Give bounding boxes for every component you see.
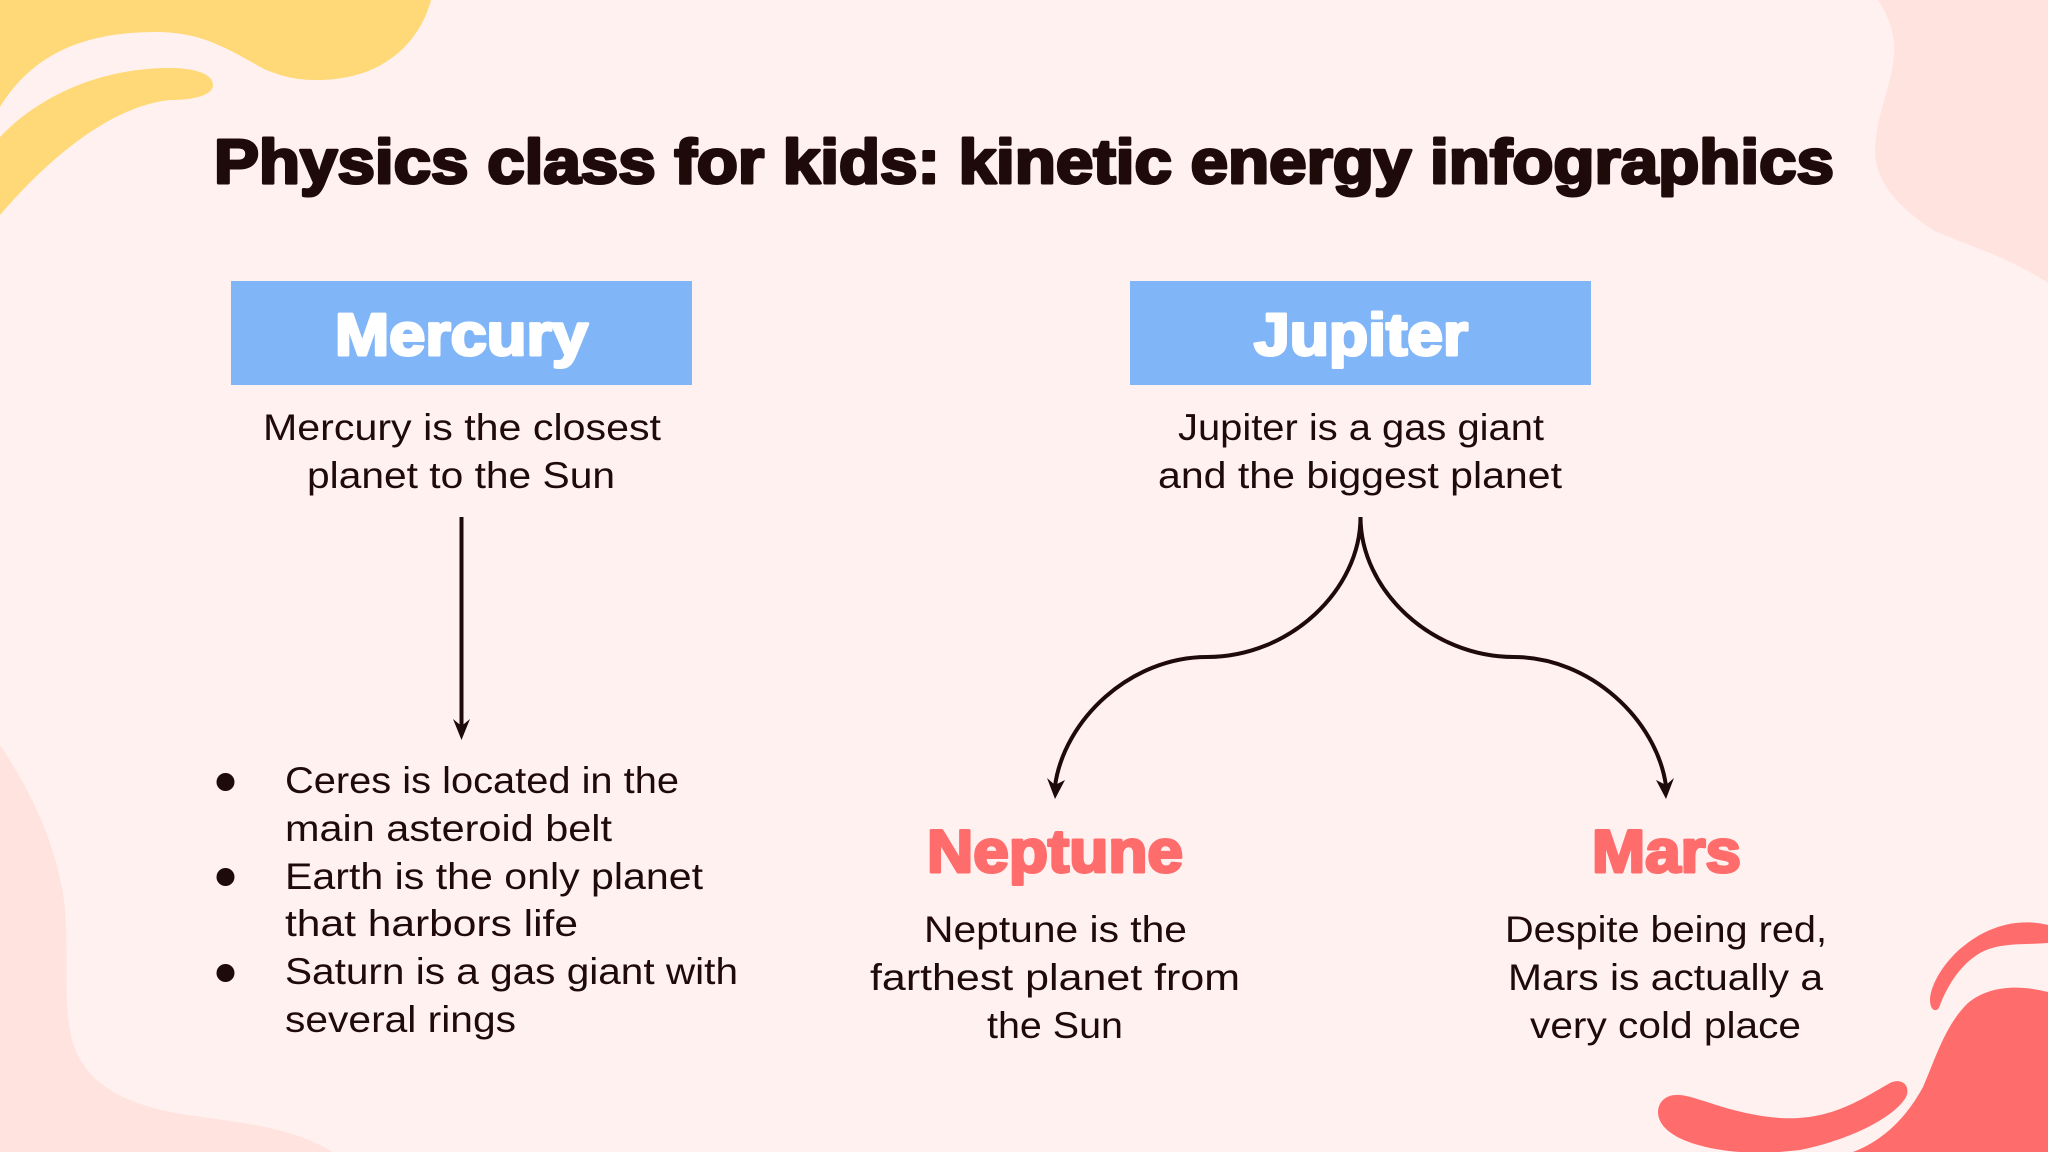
Mars description: very cold place (1530, 1005, 1801, 1046)
decoration: yellow blob top left (0, 0, 431, 215)
bullet: Saturn (216, 951, 738, 1040)
Jupiter description (1158, 407, 1563, 496)
bullet: Earth: Earth is the only planet (285, 856, 704, 897)
Jupiter description: and the biggest planet (1158, 455, 1563, 496)
decoration: pink blob bottom left (0, 745, 332, 1152)
decoration: red blobs bottom right (1658, 922, 2048, 1152)
Mars description: Mars is actually a (1508, 957, 1823, 998)
bullet: Ceres (216, 760, 679, 849)
Jupiter header box (1130, 281, 1591, 385)
Jupiter description: Jupiter is a gas giant (1178, 407, 1545, 448)
panel: Jupiter (1130, 281, 1591, 496)
arrows: Jupiter branching to Neptune and Mars (1047, 517, 1674, 799)
Neptune description (870, 909, 1240, 1046)
Neptune description: Neptune is the (924, 909, 1187, 950)
Mars description: Despite being red, (1505, 909, 1827, 950)
Mars heading: Mars (1592, 818, 1741, 885)
bullet: Ceres: Ceres is located in the (285, 760, 679, 801)
Mercury header box (231, 281, 692, 385)
bullet: Saturn: Saturn is a gas giant with (285, 951, 738, 992)
Mercury description: planet to the Sun (307, 455, 615, 496)
bullet: Ceres: main asteroid belt (285, 808, 613, 849)
Jupiter heading: Jupiter (1254, 302, 1468, 368)
Mercury description: Mercury is the closest (263, 407, 662, 448)
Mars description (1505, 909, 1827, 1046)
decoration: pink blob top right (1875, 0, 2048, 283)
Mercury description (263, 407, 662, 496)
bullet: Earth: that harbors life (285, 903, 578, 944)
title: Physics class for kids: kinetic energy infographics (214, 128, 1834, 197)
Neptune heading: Neptune (927, 818, 1183, 885)
Neptune description: farthest planet from (870, 957, 1240, 998)
panel: Mars (1505, 818, 1827, 1046)
panel: Neptune (870, 818, 1240, 1046)
bullet: Saturn: several rings (285, 999, 516, 1040)
Neptune description: the Sun (987, 1005, 1123, 1046)
bullet: Earth (216, 856, 704, 944)
bullet list (216, 760, 738, 1040)
arrow: Mercury down to list (453, 517, 470, 740)
panel: Mercury (231, 281, 692, 496)
Mercury heading: Mercury (335, 302, 588, 368)
